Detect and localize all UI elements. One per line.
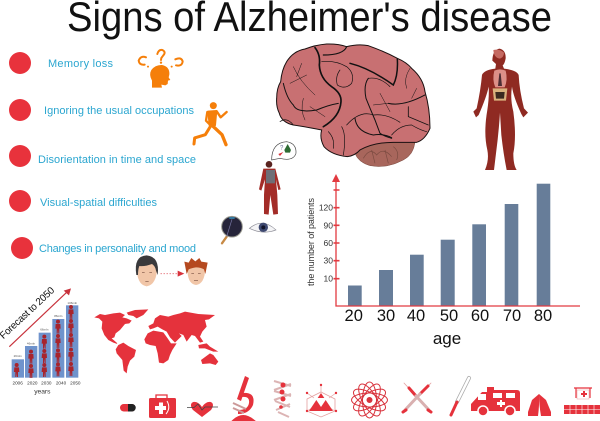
x axis title: age xyxy=(433,329,461,348)
sign: memory loss: Memory loss xyxy=(48,58,114,70)
y tick labels: 90 xyxy=(324,220,333,230)
y axis arrow xyxy=(332,174,340,182)
axis title: years xyxy=(34,388,51,395)
x tick labels: 30 xyxy=(377,307,395,325)
x tick labels: 70 xyxy=(503,307,521,325)
bars xyxy=(12,305,78,378)
values xyxy=(14,301,78,358)
cerebrum xyxy=(277,44,430,157)
y tick labels: 120 xyxy=(319,203,333,213)
years: 2050 xyxy=(70,381,81,386)
years: 2030 xyxy=(41,381,52,386)
icon row: medical xyxy=(120,376,600,420)
dotted arrow xyxy=(161,271,184,277)
icon: lungs xyxy=(528,394,551,416)
icon: head with question marks xyxy=(139,50,183,88)
years: 2006 xyxy=(12,381,23,386)
x tick labels xyxy=(345,307,552,325)
values: 66mln xyxy=(40,328,49,332)
sign: visual-spatial: Visual-spatial difficulties xyxy=(40,197,158,209)
sign: visual-spatial xyxy=(9,190,158,212)
australia xyxy=(201,353,218,365)
sign: memory loss xyxy=(9,52,114,74)
x tick labels: 40 xyxy=(407,307,425,325)
face after xyxy=(184,258,208,285)
thought bubble xyxy=(272,142,296,160)
x tick labels: 80 xyxy=(534,307,552,325)
person pictograms xyxy=(14,305,74,378)
sulci xyxy=(280,47,428,155)
values: 86mln xyxy=(54,314,63,318)
x tick labels: 60 xyxy=(471,307,489,325)
icon: hospital xyxy=(564,388,600,414)
icon: ambulance xyxy=(471,387,520,416)
icon: thermometer xyxy=(451,378,469,415)
icon: running person xyxy=(194,102,227,145)
sign: ignoring occupations xyxy=(9,99,194,121)
icon: DNA strand xyxy=(274,381,291,417)
x tick labels: 50 xyxy=(440,307,458,325)
values: 46mln xyxy=(27,341,35,345)
face before xyxy=(136,255,158,286)
world map xyxy=(94,309,218,373)
y tick labels: 10 xyxy=(324,274,333,284)
y tick labels xyxy=(319,203,333,284)
icon: heart with pulse xyxy=(187,402,218,417)
bars xyxy=(348,184,550,306)
small person with thought bubble xyxy=(259,142,296,215)
eurasia xyxy=(148,312,215,343)
values: 26mln xyxy=(14,354,22,358)
sign: personality: Changes in personality and mood xyxy=(39,243,196,255)
x tick labels: 20 xyxy=(345,307,363,325)
cerebellum xyxy=(355,141,415,167)
brain illustration xyxy=(277,44,430,167)
icon: crossed syringes xyxy=(403,383,431,412)
years xyxy=(12,381,81,386)
small person with thought bubble: ? xyxy=(280,145,284,151)
south america xyxy=(116,343,136,373)
human body with organs xyxy=(473,49,528,170)
greenland xyxy=(127,309,148,318)
years: 2020 xyxy=(27,381,38,386)
figure xyxy=(266,161,272,168)
bar chart: patients by age xyxy=(306,174,580,348)
icon: virus xyxy=(306,384,337,417)
y tick labels: 30 xyxy=(324,256,333,266)
icon: first aid kit xyxy=(149,395,176,418)
icon: eye xyxy=(249,223,276,232)
years: 2040 xyxy=(56,381,67,386)
sign: disorientation xyxy=(9,145,196,167)
icon: pill xyxy=(120,404,136,412)
trend arrow xyxy=(9,288,71,347)
sign: disorientation: Disorientation in time and space xyxy=(38,154,196,166)
africa xyxy=(144,331,177,363)
icon: microscope xyxy=(233,376,254,420)
icon: eye anatomy cross section xyxy=(222,216,242,243)
faces: personality change xyxy=(136,255,208,286)
panel: list of signs xyxy=(9,52,196,259)
southeast asia islands xyxy=(198,343,218,352)
y axis title: the number of patients xyxy=(306,198,316,286)
sign: personality xyxy=(11,237,196,259)
organs xyxy=(493,50,504,59)
axes xyxy=(334,180,580,306)
values: 106mln xyxy=(67,301,78,305)
y tick labels: 60 xyxy=(324,238,333,248)
north america xyxy=(94,313,132,344)
sign: ignoring occupations: Ignoring the usual occupations xyxy=(44,105,194,117)
forecast bar chart xyxy=(0,285,81,395)
icon: atom flower xyxy=(350,381,389,419)
